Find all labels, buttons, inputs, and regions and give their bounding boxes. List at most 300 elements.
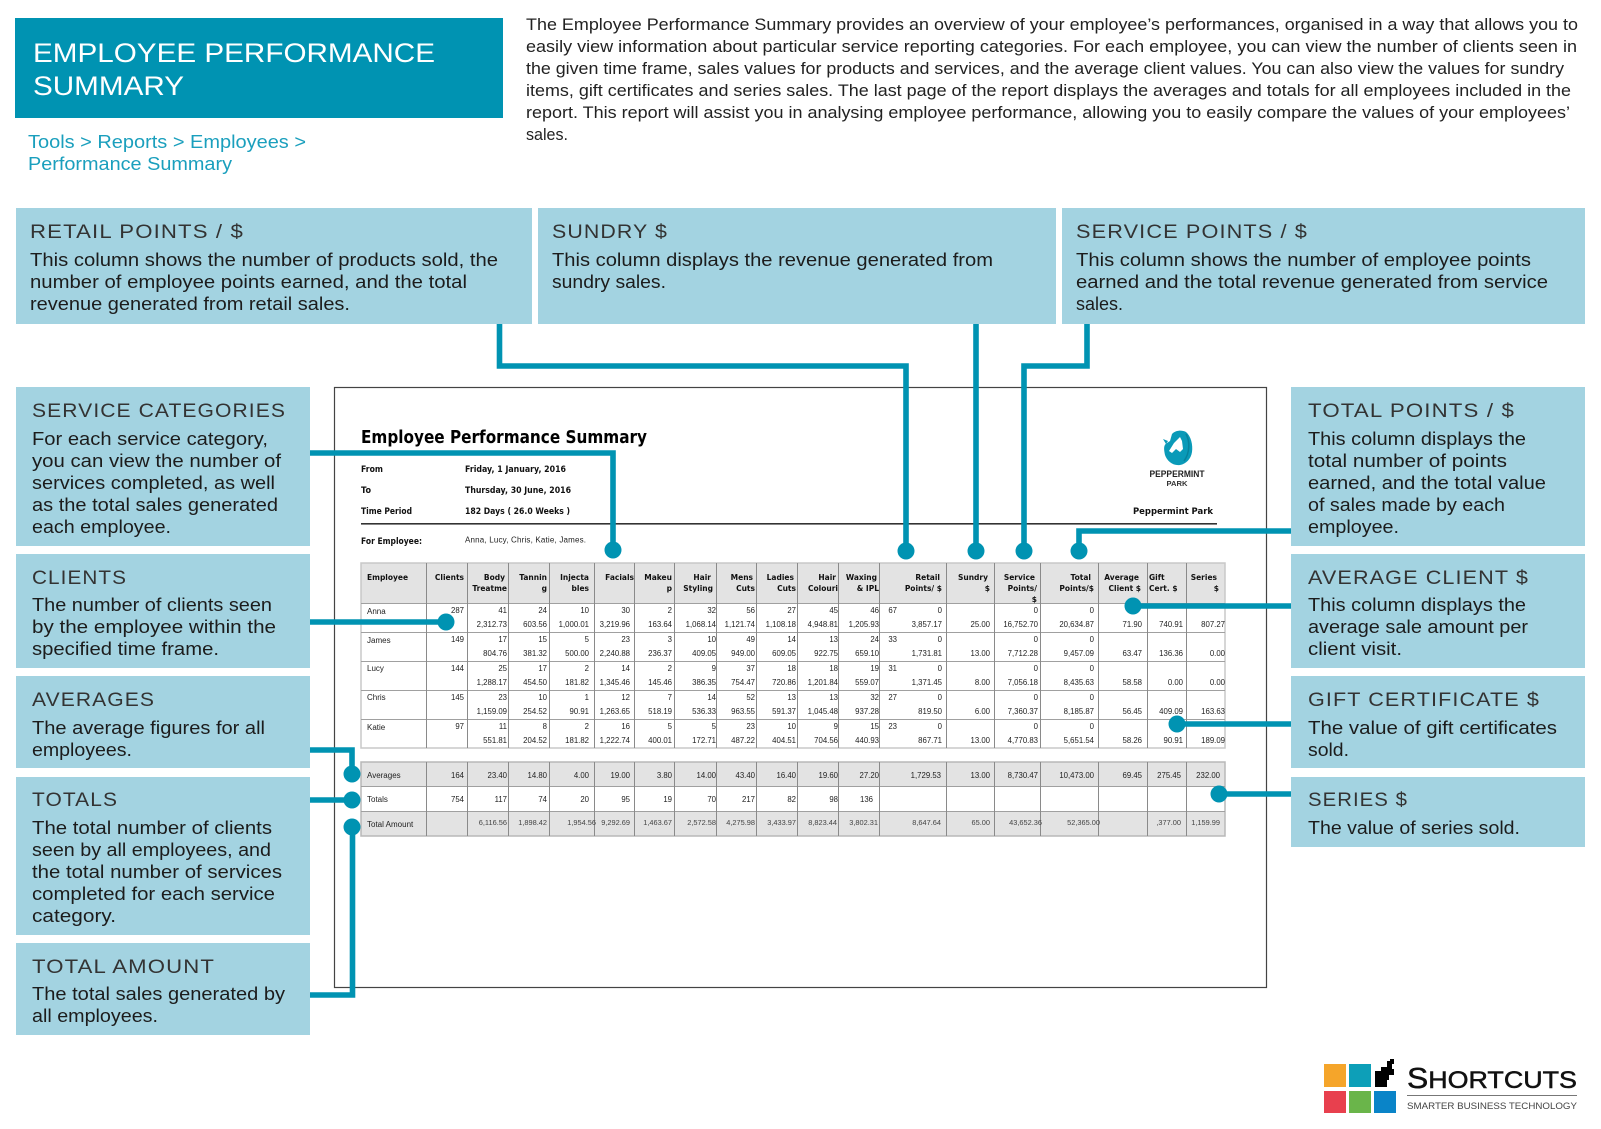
row: James: 17	[498, 635, 507, 644]
breadcrumb	[28, 131, 306, 174]
panel: service categories: SERVICE CATEGORIES	[32, 400, 286, 422]
row: Lucy: 7,056.18	[1008, 678, 1038, 687]
row: Katie: 172.71	[692, 736, 716, 745]
row: Katie: 23	[746, 722, 755, 731]
report date details: Time Period	[361, 506, 412, 516]
row: Totals: 117	[495, 795, 507, 804]
table header: Cuts	[736, 584, 756, 593]
row: Anna: 30	[621, 606, 631, 615]
row: Total Amount: 4,275.98	[726, 818, 755, 827]
icon: Shortcuts logo	[1324, 1059, 1578, 1113]
row: Lucy: 18	[787, 664, 796, 673]
row: Totals: 217	[742, 795, 755, 804]
table header: Mens	[731, 573, 754, 582]
row: James: 3	[668, 635, 672, 644]
panel: clients: by the employee within the	[32, 617, 276, 637]
row: Chris: 254.52	[523, 707, 547, 716]
row: Averages: 27.20	[859, 771, 880, 780]
row: Chris: 0	[1090, 693, 1095, 702]
row: Chris: 518.19	[648, 707, 672, 716]
row: Averages: 10,473.00	[1059, 771, 1095, 780]
row: Lucy: 9	[712, 664, 716, 673]
panel: average client: average sale amount per	[1308, 617, 1528, 637]
table header: Treatme	[472, 584, 507, 593]
row: Lucy: 720.86	[772, 678, 796, 687]
row: Lucy: 8,435.63	[1064, 678, 1094, 687]
row: Anna: 0	[1034, 606, 1039, 615]
row: Lucy: 0	[1090, 664, 1095, 673]
row: Katie: 5,651.54	[1064, 736, 1095, 745]
report date details: Thursday, 30 June, 2016	[465, 485, 571, 495]
table header: Tannin	[519, 573, 547, 582]
panel: service categories: services completed, as well	[32, 473, 275, 493]
table header: $	[1214, 584, 1219, 593]
row: Katie: 10	[787, 722, 797, 731]
row: Katie: 551.81	[483, 736, 507, 745]
row: Chris: 12	[621, 693, 630, 702]
table header: Ladies	[767, 573, 795, 582]
intro paragraph: The Employee Performance Summary provides an overview of your employee’s performances, organised in a way that allows you to	[526, 15, 1578, 34]
table header	[367, 573, 1219, 604]
panel: retail points: revenue generated from retail sales.	[30, 294, 350, 314]
table header: Waxing	[846, 573, 877, 582]
table header: $	[985, 584, 990, 593]
panel: totals	[16, 777, 310, 935]
panel: service points: earned and the total revenue generated from service	[1076, 272, 1548, 292]
row: Lucy: 0.00	[1210, 678, 1226, 687]
panel: total points: total number of points	[1308, 451, 1507, 471]
row: James: 15	[538, 635, 548, 644]
row: Lucy: 144	[451, 664, 465, 673]
row: James: 949.00	[731, 649, 756, 658]
panel: average client: client visit.	[1308, 639, 1402, 659]
table header: Client $	[1108, 584, 1141, 593]
row: Chris: 536.33	[692, 707, 716, 716]
panel: sundry: SUNDRY $	[552, 221, 668, 243]
row: Lucy: 1,201.84	[808, 678, 839, 687]
report title: Employee Performance Summary	[361, 427, 647, 448]
panel: service categories	[16, 387, 310, 546]
row: James: 33	[888, 635, 897, 644]
row: Anna: 2	[668, 606, 672, 615]
table header: g	[542, 584, 547, 593]
row: Lucy: 0	[938, 664, 943, 673]
row: Lucy: 8.00	[975, 678, 991, 687]
row: James: 922.75	[814, 649, 839, 658]
table header: Colouri	[808, 584, 838, 593]
row: Lucy: 58.58	[1122, 678, 1142, 687]
table header: Retail	[915, 573, 940, 582]
row: Katie: 1,222.74	[600, 736, 631, 745]
panel: service points	[1062, 208, 1585, 324]
row: James: 0	[1034, 635, 1039, 644]
breadcrumb: Tools > Reports > Employees >	[28, 131, 306, 152]
table header: $	[1032, 595, 1037, 604]
title banner: SUMMARY	[33, 71, 184, 101]
row: Totals: 98	[829, 795, 838, 804]
panel: retail points: RETAIL POINTS / $	[30, 221, 244, 243]
table header: Gift	[1149, 573, 1165, 582]
panel: averages: The average figures for all	[32, 718, 265, 738]
row: Total Amount: Total Amount	[367, 820, 414, 829]
row: Chris: 10	[538, 693, 548, 702]
table header: p	[667, 584, 673, 593]
panel: averages: employees.	[32, 740, 132, 760]
row: Averages: 8,730.47	[1008, 771, 1038, 780]
row: James: 0.00	[1210, 649, 1226, 658]
panel: total points: of sales made by each	[1308, 495, 1505, 515]
row: Anna: 1,000.01	[559, 620, 589, 629]
intro paragraph: easily view information about particular service reporting categories. For each employee, you can view the number of clients seen in	[526, 37, 1577, 56]
row: Anna: 20,634.87	[1059, 620, 1094, 629]
panel: total amount: The total sales generated by	[32, 984, 285, 1004]
row: Katie: 2	[585, 722, 589, 731]
row: Total Amount: 43,652.36	[1009, 818, 1042, 827]
connector: total points	[1070, 531, 1291, 560]
panel: totals: completed for each service	[32, 884, 275, 904]
row: Chris: 13	[829, 693, 838, 702]
panel: totals: category.	[32, 906, 116, 926]
report date details: From	[361, 464, 383, 474]
panel: averages: AVERAGES	[32, 689, 155, 711]
row: Averages: Averages	[367, 771, 401, 780]
row: Totals: 74	[538, 795, 548, 804]
row: Total Amount: 1,898.42	[518, 818, 547, 827]
icon: Shortcuts logo: SHORTCUTS	[1407, 1063, 1577, 1095]
row: Lucy: 0	[1034, 664, 1039, 673]
panel: total points: TOTAL POINTS / $	[1308, 400, 1515, 422]
row: Anna: 740.91	[1159, 620, 1183, 629]
row: James: 2,240.88	[600, 649, 630, 658]
row: Chris: 1,045.48	[808, 707, 838, 716]
row: Katie	[367, 722, 1225, 745]
row: Anna: 0	[1090, 606, 1095, 615]
row: Chris: 27	[888, 693, 897, 702]
row: Total Amount: 1,954.56	[567, 818, 596, 827]
connector: retail points	[500, 324, 914, 560]
panel: gift certificate: The value of gift certificates	[1308, 718, 1557, 738]
row: Averages: 16.40	[776, 771, 797, 780]
row: Averages: 4.00	[574, 771, 590, 780]
row: Lucy: 1,345.46	[600, 678, 630, 687]
row: Anna: Anna	[367, 607, 386, 616]
panel: totals: the total number of services	[32, 862, 282, 882]
connector: totals	[310, 792, 360, 808]
row: Lucy: 559.07	[855, 678, 879, 687]
row: Total Amount: 9,292.69	[601, 818, 630, 827]
panel: series: The value of series sold.	[1308, 818, 1520, 838]
icon: Peppermint Park logo	[1133, 431, 1213, 516]
row: Totals: 754	[451, 795, 465, 804]
row: Anna: 32	[707, 606, 716, 615]
row: Anna: 1,205.93	[849, 620, 879, 629]
row: Katie: 0	[1034, 722, 1039, 731]
row: Anna: 0	[938, 606, 943, 615]
row: James: 23	[621, 635, 630, 644]
row: Lucy: 1,371.45	[912, 678, 943, 687]
connector: gift certificate	[1168, 716, 1291, 732]
icon: Peppermint Park logo: Peppermint Park	[1133, 506, 1213, 516]
row: Total Amount: 65.00	[972, 818, 990, 827]
summary table	[361, 762, 1225, 836]
row: Katie: 204.52	[523, 736, 547, 745]
row: Averages: 275.45	[1157, 771, 1182, 780]
row: Lucy: 1,288.17	[477, 678, 507, 687]
panel: totals: TOTALS	[32, 789, 118, 811]
row: Total Amount: 3,802.31	[849, 818, 878, 827]
row: Totals: 95	[621, 795, 631, 804]
row: Averages: 14.00	[696, 771, 717, 780]
row: Chris: 1	[585, 693, 589, 702]
row: Chris: 13	[787, 693, 796, 702]
panel: report page	[334, 388, 1266, 988]
row: Chris: 1,263.65	[600, 707, 631, 716]
panel: total points: This column displays the	[1308, 429, 1526, 449]
report date details: To	[361, 485, 371, 495]
row: Totals	[367, 795, 873, 804]
row: Anna: 4,948.81	[808, 620, 838, 629]
row: Katie: 867.71	[918, 736, 942, 745]
breadcrumb: Performance Summary	[28, 153, 233, 174]
row: Totals: 136	[860, 795, 873, 804]
row: Lucy: 31	[888, 664, 897, 673]
panel: average client: AVERAGE CLIENT $	[1308, 567, 1529, 589]
row: Katie: 189.09	[1201, 736, 1225, 745]
row: Lucy: 454.50	[523, 678, 548, 687]
row: Katie: 23	[888, 722, 897, 731]
table header: Injecta	[560, 573, 589, 582]
panel: retail points: number of employee points earned, and the total	[30, 272, 467, 292]
row: Chris: 819.50	[918, 707, 943, 716]
row: Katie: 58.26	[1122, 736, 1142, 745]
report date details: Friday, 1 January, 2016	[465, 464, 566, 474]
title banner	[15, 18, 503, 118]
row: Anna: 56	[746, 606, 755, 615]
row: Total Amount: 1,463.67	[643, 818, 672, 827]
row: Chris: 32	[870, 693, 879, 702]
table header: Makeu	[644, 573, 672, 582]
row: Chris: 963.55	[731, 707, 756, 716]
row: Chris: 56.45	[1122, 707, 1143, 716]
table header: Hair	[693, 573, 711, 582]
row: Katie: 90.91	[1163, 736, 1183, 745]
panel: gift certificate	[1291, 676, 1585, 768]
panel: retail points: This column shows the number of products sold, the	[30, 250, 498, 270]
row: James: 409.05	[692, 649, 717, 658]
row: Anna: 71.90	[1122, 620, 1143, 629]
row: James: 13	[829, 635, 838, 644]
row: Chris: 163.63	[1201, 707, 1225, 716]
panel: totals: The total number of clients	[32, 818, 272, 838]
row: Averages: 23.40	[487, 771, 508, 780]
row: James: 381.32	[523, 649, 547, 658]
row: Anna: 2,312.73	[477, 620, 507, 629]
row: Averages: 14.80	[527, 771, 548, 780]
row: James: 10	[707, 635, 717, 644]
row: Anna: 16,752.70	[1003, 620, 1039, 629]
row: Katie: 0	[938, 722, 943, 731]
table header: Points/$	[1059, 584, 1094, 593]
row: James: 236.37	[648, 649, 672, 658]
panel: gift certificate: sold.	[1308, 740, 1349, 760]
row: James: 13.00	[970, 649, 991, 658]
panel: service points: sales.	[1076, 294, 1123, 314]
row: James: 24	[870, 635, 880, 644]
table header: Points/ $	[905, 584, 942, 593]
row: Totals: 82	[787, 795, 796, 804]
panel: total amount	[16, 943, 310, 1035]
panel: total amount: all employees.	[32, 1006, 158, 1026]
table header: Series	[1191, 573, 1218, 582]
row: Chris: 1,159.09	[477, 707, 507, 716]
row: James: 9,457.09	[1064, 649, 1094, 658]
panel: total points	[1291, 387, 1585, 546]
table header: bles	[572, 584, 590, 593]
title banner: EMPLOYEE PERFORMANCE	[33, 38, 435, 68]
connector: clients	[310, 614, 454, 630]
row: Total Amount: 52,365.00	[1067, 818, 1100, 827]
row: James: 5	[585, 635, 590, 644]
row: Katie: 13.00	[970, 736, 991, 745]
row: Totals: Totals	[367, 795, 388, 804]
panel: total amount: TOTAL AMOUNT	[32, 956, 215, 978]
row: Total Amount: 6,116.56	[479, 818, 507, 827]
row: Chris: 14	[707, 693, 717, 702]
row: Anna: 27	[787, 606, 796, 615]
panel: total points: earned, and the total value	[1308, 473, 1546, 493]
row: Katie: Katie	[367, 723, 386, 732]
panel: series: SERIES $	[1308, 789, 1408, 811]
panel: gift certificate: GIFT CERTIFICATE $	[1308, 689, 1540, 711]
icon: Shortcuts logo: SMARTER BUSINESS TECHNOLOGY	[1407, 1101, 1578, 1112]
table header: Average	[1104, 573, 1139, 582]
row: Chris: Chris	[367, 693, 386, 702]
row: Chris: 409.09	[1159, 707, 1183, 716]
row: Lucy: 386.35	[692, 678, 717, 687]
panel: averages	[16, 676, 310, 768]
panel: sundry: This column displays the revenue generated from	[552, 250, 993, 270]
intro paragraph: items, gift certificates and series sales. The last page of the report displays the averages and totals for all employees included in the	[526, 81, 1571, 100]
row: Lucy: 0.00	[1168, 678, 1184, 687]
row: Lucy: 14	[621, 664, 631, 673]
row: Totals: 70	[707, 795, 717, 804]
row: Totals: 19	[663, 795, 672, 804]
row: Averages: 232.00	[1196, 771, 1221, 780]
row: Total Amount: ,377.00	[1156, 818, 1181, 827]
row: Katie: 8	[543, 722, 547, 731]
row: Anna: 1,121.74	[725, 620, 756, 629]
table header: Points/	[1008, 584, 1037, 593]
row: Katie: 440.93	[855, 736, 879, 745]
row: Total Amount	[367, 818, 1220, 829]
table header: Body	[484, 573, 505, 582]
connector: averages	[310, 750, 360, 782]
panel: clients: The number of clients seen	[32, 595, 272, 615]
row: Anna: 3,219.96	[600, 620, 630, 629]
table header: Sundry	[958, 573, 988, 582]
panel: average client: This column displays the	[1308, 595, 1526, 615]
connector: series	[1210, 786, 1291, 802]
row: Chris: 0	[938, 693, 943, 702]
row: Total Amount: 8,823.44	[808, 818, 837, 827]
row: James: 0	[1090, 635, 1095, 644]
table header: Total	[1070, 573, 1091, 582]
row: Anna: 24	[538, 606, 548, 615]
panel: service categories: as the total sales generated	[32, 495, 278, 515]
row: Chris: 23	[498, 693, 507, 702]
row: Lucy: 754.47	[731, 678, 755, 687]
row: Katie: 404.51	[772, 736, 796, 745]
row: Total Amount: 3,433.97	[767, 818, 796, 827]
row: Chris: 145	[451, 693, 465, 702]
row: Total Amount: 2,572.58	[687, 818, 716, 827]
row: James: 149	[451, 635, 464, 644]
row: Lucy	[367, 664, 1226, 687]
row: Totals: 20	[580, 795, 590, 804]
row: Katie: 181.82	[565, 736, 589, 745]
row: Lucy: 181.82	[565, 678, 589, 687]
row: James: 1,731.81	[912, 649, 942, 658]
connector: sundry	[968, 324, 984, 560]
row: James: 14	[787, 635, 797, 644]
row: Anna: 45	[829, 606, 839, 615]
table header: Service	[1004, 573, 1035, 582]
row: Anna: 41	[498, 606, 507, 615]
table header: & IPL	[857, 584, 879, 593]
row: Katie: 16	[621, 722, 630, 731]
row: Chris: 52	[746, 693, 755, 702]
row: Katie: 4,770.83	[1008, 736, 1038, 745]
row: Anna: 287	[451, 606, 464, 615]
row: James: 7,712.28	[1008, 649, 1038, 658]
row: Averages: 19.60	[818, 771, 839, 780]
table header: Styling	[683, 584, 713, 593]
panel: clients: specified time frame.	[32, 639, 219, 659]
row: Averages	[367, 771, 1221, 780]
row: James: 63.47	[1122, 649, 1142, 658]
connector: average client	[1124, 598, 1291, 614]
row: James: 500.00	[565, 649, 590, 658]
intro paragraph	[526, 15, 1578, 144]
row: Anna: 25.00	[970, 620, 991, 629]
panel: sundry: sundry sales.	[552, 272, 666, 292]
row: Anna: 807.27	[1201, 620, 1225, 629]
table header: Hair	[818, 573, 836, 582]
row: James: 659.10	[855, 649, 880, 658]
row: Katie: 0	[1090, 722, 1095, 731]
row: James: 804.76	[483, 649, 507, 658]
panel: clients: CLIENTS	[32, 567, 127, 589]
row: Lucy: 2	[668, 664, 672, 673]
row: Anna	[367, 606, 1225, 629]
intro paragraph: report. This report will assist you in analysing employee performance, allowing you to easily compare the values of your employees’	[526, 103, 1570, 122]
row: Lucy: 145.46	[648, 678, 672, 687]
row: Averages: 69.45	[1122, 771, 1143, 780]
row: Anna: 10	[580, 606, 590, 615]
row: James: 609.05	[772, 649, 797, 658]
row: Anna: 3,857.17	[912, 620, 942, 629]
row: Katie: 15	[870, 722, 880, 731]
row: Katie: 5	[668, 722, 673, 731]
table header: Employee	[367, 573, 408, 582]
row: James: 49	[746, 635, 755, 644]
employee table	[361, 563, 1226, 748]
row: Averages: 164	[451, 771, 465, 780]
panel: total points: employee.	[1308, 517, 1399, 537]
employee filter: Anna, Lucy, Chris, Katie, James.	[465, 536, 586, 544]
row: Katie: 97	[455, 722, 464, 731]
row: Total Amount: 8,647.64	[912, 818, 941, 827]
